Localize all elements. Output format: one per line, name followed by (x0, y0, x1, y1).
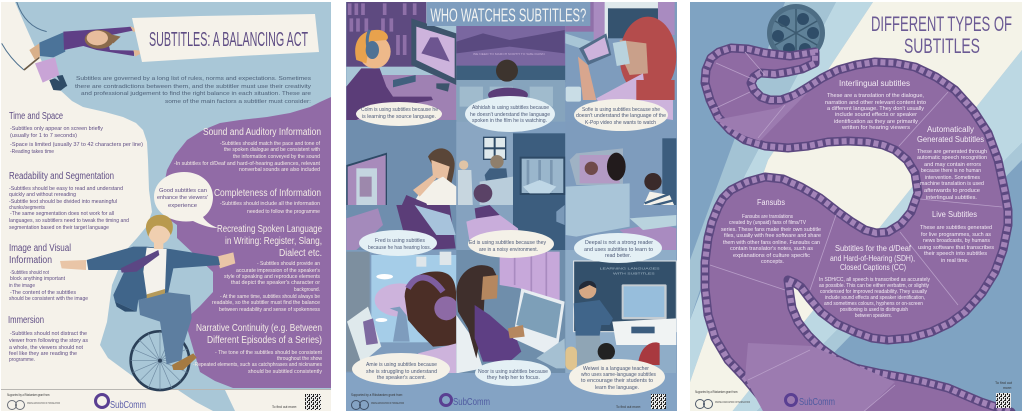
speech bubble: Noor: they help her to focus. (487, 375, 540, 381)
text block: image and visual information: block anything important (10, 276, 66, 282)
text block: live subtitles (918, 210, 995, 264)
cell: Deepal, upper part (565, 134, 676, 210)
text block: image and visual information: should be consistent with the image (9, 296, 88, 302)
text block: sound and auditory information (174, 127, 321, 173)
footer (351, 393, 666, 410)
text block: automatically generated subtitles: because there is no human (921, 168, 981, 174)
text block: SDH and closed captions: Closed Captions (CC) (840, 263, 906, 272)
speech bubble: Ed: Ed is using subtitles because they (469, 240, 547, 246)
text block: SDH and closed captions: and sometimes colours, hyphens or on-screen (824, 301, 923, 307)
text block: readability and segmentation: segmentation based on their target language (9, 225, 109, 231)
text block: SDH and closed captions: between speakers. (855, 313, 892, 319)
cell: Abhidah (456, 26, 566, 107)
intro text: some of the main factors a subtitler must consider: (165, 99, 311, 105)
text block: interlingual subtitles: written for hearing viewers (842, 125, 911, 131)
text block: SDH and closed captions: Subtitles for the d/Deaf (835, 244, 912, 253)
partner logo (8, 400, 60, 410)
speech bubble: enhance the viewers' (157, 195, 208, 201)
cell: Ed, lower part (456, 205, 565, 250)
speech bubble: Fred (359, 230, 437, 256)
text block: SDH and closed captions: include sound effects and speaker identification, (825, 295, 925, 301)
title (871, 13, 1012, 58)
speech bubble: Sofie (574, 99, 668, 131)
illustration: man on unicycle (60, 215, 235, 390)
text block: live subtitles: their speech into subtitles (924, 251, 988, 257)
footer (695, 381, 1012, 408)
text block: time and space (9, 111, 143, 155)
text block: immersion: programme. (9, 357, 35, 363)
head (148, 226, 170, 244)
text block: fansubs: Fansubs (757, 198, 785, 207)
text block: live subtitles: using software that transcribes (918, 245, 995, 251)
text block: narrative continuity (193, 323, 323, 375)
text block: recreating spoken language: that depict the speaker's character or (231, 280, 320, 286)
speech bubble: Deepal (574, 233, 662, 263)
speech bubble: Abhidah: he doesn't understand the language (470, 112, 550, 118)
comic cells: middle and bottom rows (346, 205, 676, 373)
text block: recreating spoken language: style of speaking and reproduce elements (224, 274, 321, 280)
text block: completeness of information (214, 188, 321, 215)
speech bubble: Weiwei: Weiwei is a language teacher (583, 366, 649, 372)
text block: automatically generated subtitles: machine translation is used (920, 181, 984, 187)
text block: time and space: -Space is limited (usually 37 to 42 characters per line) (10, 142, 143, 148)
title banner (132, 14, 319, 62)
text block: interlingual subtitles: Interlingual subtitles (839, 79, 910, 88)
text block: interlingual subtitles (825, 79, 926, 131)
speech bubble: Deepal: and uses subtitles to learn to (584, 247, 653, 253)
qr code: To find out more: (616, 405, 641, 409)
unicycle wheel (131, 331, 189, 390)
text block: narrative continuity: -Repeated elements, such as catchphrases and nicknames (193, 362, 322, 368)
text block: interlingual subtitles: narration and other relevant content into (825, 100, 926, 106)
speech bubble: Ed (468, 230, 554, 258)
trousers (138, 292, 192, 364)
cell: Ed, upper part (456, 122, 565, 210)
text block: time and space: -Reading takes time (10, 149, 54, 155)
text block: live subtitles: in real time. (941, 258, 969, 264)
title: SUBTITLES: A BALANCING ACT (149, 29, 308, 51)
panel: subtitles a balancing act (1, 2, 331, 413)
text block: narrative continuity: Different Episodes of a Series) (207, 335, 322, 346)
film strip ribbon (705, 48, 1015, 413)
intro text: Subtitles are governed by a long list of rules, norms and expectations. Sometimes (76, 76, 311, 82)
text block: fansubs: files, usually with free software and share (724, 233, 821, 239)
text block: readability and segmentation: -Subtitle text should be divided into meaningful (9, 199, 117, 205)
qr code: To find out (995, 381, 1012, 385)
background shape: blue wave (15, 2, 331, 413)
speech bubble: Abhidah: Abhidah is using subtitles because (472, 105, 549, 111)
text block: automatically generated subtitles: intervention. Sometimes (925, 175, 981, 181)
text block: completeness of information: -Subtitles should include all the information (220, 201, 320, 207)
footer band (1, 389, 331, 411)
text block: immersion: a whole, the viewers should not (9, 345, 84, 351)
subcomm logo: SubComm (453, 397, 490, 408)
text block: immersion: Immersion (8, 315, 44, 326)
text block: narrative continuity: throughout the show (277, 356, 322, 362)
text block: live subtitles: for live programmes, such as (921, 232, 992, 238)
text block: recreating spoken language: between readability and sense of spokenness (219, 307, 320, 313)
text block: completeness of information: Completeness of Information (214, 188, 321, 199)
text block: interlingual subtitles: include sound effects or speaker (835, 112, 917, 118)
qr code (616, 394, 666, 409)
intro text (75, 76, 311, 105)
text block: immersion: feel like they are reading the (9, 351, 77, 357)
text block: fansubs: Fansubs are translations (742, 214, 793, 220)
speech bubble (154, 172, 218, 228)
speech bubble: Abhidah: spoken in the film he is watching. (472, 118, 547, 124)
speech bubble: Amie (352, 353, 450, 385)
subcomm logo (786, 394, 835, 408)
cell: Amie (346, 250, 458, 373)
text block: narrative continuity: Narrative Continuity (e.g. Between (196, 323, 322, 334)
speech bubble: Weiwei: who uses same-language subtitles (581, 372, 656, 378)
partner logo: FINNISH ASSOCIATION OF TRANSLATORS (371, 401, 404, 405)
text block: automatically generated subtitles: Automatically (927, 125, 974, 134)
text block: sound and auditory information: nonverbal sounds are also included (239, 167, 320, 173)
qr code: To find out more: (272, 405, 297, 409)
speech bubble: Sofie: doesn't understand the language of the (576, 113, 666, 119)
text block: image and visual information: Information (9, 255, 52, 266)
text block: automatically generated subtitles: and may contain errors (924, 162, 982, 168)
speech bubble: Fred: because he has hearing loss. (368, 245, 431, 251)
text block: readability and segmentation: quickly and without rereading (9, 192, 76, 198)
speech bubble: Colm: Colm is using subtitles because he (361, 107, 438, 113)
text block: immersion: -Subtitles should not distract the (10, 331, 87, 337)
text block: automatically generated subtitles: afterwards to produce (924, 188, 980, 194)
text block: recreating spoken language: - At the same time, subtitles should always be (220, 294, 320, 300)
speech bubble: Colm (356, 102, 442, 126)
intro text: and professional judgement to find the right balance in each situation. These are (81, 91, 311, 97)
text block: readability and segmentation: languages, so subtitlers need to tweak the timing and (9, 218, 129, 224)
subcomm logo (96, 394, 146, 411)
text block: recreating spoken language: Recreating Spoken Language (217, 224, 322, 235)
text block: time and space: (usually for 1 to 7 seconds) (10, 133, 77, 139)
speech bubble: Deepal: Deepal is not a strong reader (585, 240, 653, 246)
text block: SDH and closed captions: positioning is used to distinguish (840, 307, 908, 313)
speech bubble: Colm: is learning the source language. (362, 114, 436, 120)
partner logo (696, 400, 750, 408)
text block: image and visual information: -The content of the subtitles (10, 290, 77, 296)
background shape: purple area (163, 97, 331, 388)
speech bubble: experience (168, 203, 197, 209)
text block: recreating spoken language: - Subtitles should provide an (257, 261, 320, 267)
text block: recreating spoken language: Dialect etc. (279, 248, 322, 259)
partner logo (352, 400, 404, 410)
text block: fansubs: explanations of culture specific (733, 253, 811, 259)
text block: readability and segmentation: -Subtitles should be easy to read and understand (9, 186, 123, 192)
text block: interlingual subtitles: identification as they are primarily (834, 119, 919, 125)
panel: different types of subtitles (690, 2, 1022, 413)
partner logo: FINNISH ASSOCIATION OF TRANSLATORS (715, 400, 750, 404)
text block: SDH and closed captions: condensed for improved readability. They usually (820, 289, 927, 295)
text block: immersion (8, 315, 89, 363)
text block: readability and segmentation: chunks/segments (9, 205, 45, 211)
qr code: more: (1003, 386, 1012, 390)
text block: automatically generated subtitles: interlingual subtitles. (926, 195, 977, 201)
title strip (427, 2, 590, 26)
title strip: WHO WATCHES SUBTITLES? (430, 4, 586, 25)
speech bubble: Abhidah (465, 96, 555, 132)
speech bubble: Fred: Fred is using subtitles (375, 238, 426, 244)
text block: interlingual subtitles: a different language. They don't usually (827, 106, 925, 112)
text block: image and visual information (9, 243, 88, 302)
text block: recreating spoken language: in Writing: Register, Slang, (225, 236, 322, 247)
subcomm logo: SubComm (110, 400, 146, 411)
text block: automatically generated subtitles: Generated Subtitles (917, 135, 984, 144)
speech bubble: Deepal: read better. (605, 253, 631, 259)
intro text: there are contradictions between them, and the subtitler must use their creativity (75, 84, 311, 90)
text block: sound and auditory information: -Subtitles should match the pace and tone of (220, 141, 321, 147)
supported by text: Supported by a Riksbanken grant from: (7, 393, 50, 397)
text block: sound and auditory information: Sound and Auditory Information (203, 127, 321, 138)
footer (7, 393, 321, 411)
text block: readability and segmentation (9, 171, 129, 231)
text block: automatically generated subtitles: automatic speech recognition (917, 155, 987, 161)
footer band (346, 373, 677, 411)
illustration: trapeze woman (2, 2, 146, 91)
partner logo: FINNISH ASSOCIATION OF TRANSLATORS (27, 401, 60, 405)
text block: fansubs: them with other fans online. Fansubs can (723, 240, 820, 246)
text block: image and visual information: in the image (9, 283, 35, 289)
supported by text: Supported by a Riksbanken grant from: (351, 393, 403, 397)
text block: fansubs (721, 198, 821, 265)
cell: Fred, upper part (346, 120, 456, 210)
cell: Weiwei: LEARNING LANGUAGES (600, 266, 660, 270)
text block: time and space: -Subtitles only appear on screen briefly (10, 126, 104, 132)
speech bubble: Ed: are in a noisy environment. (479, 247, 538, 253)
text block: narrative continuity: - The tone of the subtitles should be consistent (215, 350, 323, 356)
subcomm logo (440, 394, 490, 408)
text block: SDH and closed captions: and Hard-of-Hearing (SDH), (830, 254, 915, 263)
text block: fansubs: created by (unpaid) fans of films/TV (729, 220, 807, 226)
text block: live subtitles: These are subtitles generated (920, 225, 992, 231)
text block: image and visual information: Image and Visual (9, 243, 71, 254)
text block: fansubs: contain translator's notes, such as (730, 246, 814, 252)
text block: fansubs: concepts. (761, 259, 784, 265)
speech bubble: Sofie: K-Pop video she wants to watch (585, 120, 656, 126)
text block: readability and segmentation: -The same segmentation does not work for all (10, 211, 114, 217)
speech bubble: Noor (475, 360, 551, 386)
cell: Weiwei: WITH SUBTITLES (613, 271, 655, 275)
cell: Colm (346, 2, 456, 120)
title: SUBTITLES (904, 35, 980, 58)
cell: Sofie (565, 2, 676, 120)
text block: SDH and closed captions: as possible. This can be either verbatim, or slightly (819, 283, 929, 289)
text block: fansubs: series. These fans make their own subtitle (721, 227, 821, 233)
text block: recreating spoken language (212, 224, 322, 313)
film reel (767, 4, 825, 62)
text block: readability and segmentation: Readability and Segmentation (9, 171, 114, 182)
background rays (690, 2, 1022, 413)
cell: Noor (456, 250, 565, 373)
speech bubble: Weiwei: to encourage their students to (581, 378, 653, 384)
text block: sound and auditory information: the spoken dialogue and be consistent with (224, 147, 320, 153)
text block: sound and auditory information: -In subtitles for d/Deaf and hard-of-hearing audiences, relevant (174, 161, 321, 167)
text block: narrative continuity: should be subtitled consistently (248, 369, 323, 375)
text block: live subtitles: news broadcasts, by humans (923, 238, 991, 244)
qr code (272, 394, 321, 410)
text block: interlingual subtitles: These are a translation of the dialogue, (827, 93, 924, 99)
text block: recreating spoken language: background. (294, 287, 320, 293)
text block: recreating spoken language: accurate impression of the speaker's (236, 268, 321, 274)
text block: sound and auditory information: the information conveyed by the sound (233, 154, 320, 160)
panel: who watches subtitles (346, 2, 677, 411)
text block: immersion: viewer from following the story as (9, 338, 89, 344)
speech bubble: Amie: she is struggling to understand (366, 369, 437, 375)
qr code (995, 381, 1012, 408)
text block: automatically generated subtitles (917, 125, 987, 201)
speech bubble: Amie: the speaker's accent. (377, 375, 426, 381)
speech bubble: Weiwei (569, 359, 665, 395)
text block: live subtitles: Live Subtitles (932, 210, 977, 219)
cell: Deepal, lower part (565, 205, 676, 250)
cell: Weiwei (565, 250, 676, 373)
jacket (87, 247, 220, 312)
subcomm logo: SubComm (799, 397, 835, 408)
text block: recreating spoken language: readable, so the subtitler must find the balance (212, 300, 320, 306)
text block: time and space: Time and Space (9, 111, 63, 122)
speech bubble: Sofie: Sofie is using subtitles because she (582, 107, 660, 113)
text block: image and visual information: -Subtitles should not (10, 270, 50, 276)
supported by text: Supported by a Riksbanken grant from: (695, 390, 738, 394)
cell: Fred, lower part (346, 205, 456, 250)
speech bubble: Amie: Amie is using subtitles because (366, 362, 437, 368)
speech bubble: Good subtitles can (159, 188, 207, 194)
text block: completeness of information: needed to follow the programme (247, 209, 320, 215)
text block: automatically generated subtitles: These are generated through (917, 149, 987, 155)
cell: Abhidah: WE NEED TO MARCH NORTH TO SIZE DAWN (473, 53, 545, 56)
speech bubble: Weiwei: learn the language. (595, 385, 639, 391)
speech bubble: Noor: Noor is using subtitles because (478, 369, 548, 375)
text block: SDH and closed captions: In SDH/CC, all speech is transcribed as accurately (819, 277, 930, 283)
comic cells: top row (346, 2, 676, 210)
text block: SDH and closed captions (819, 244, 930, 319)
